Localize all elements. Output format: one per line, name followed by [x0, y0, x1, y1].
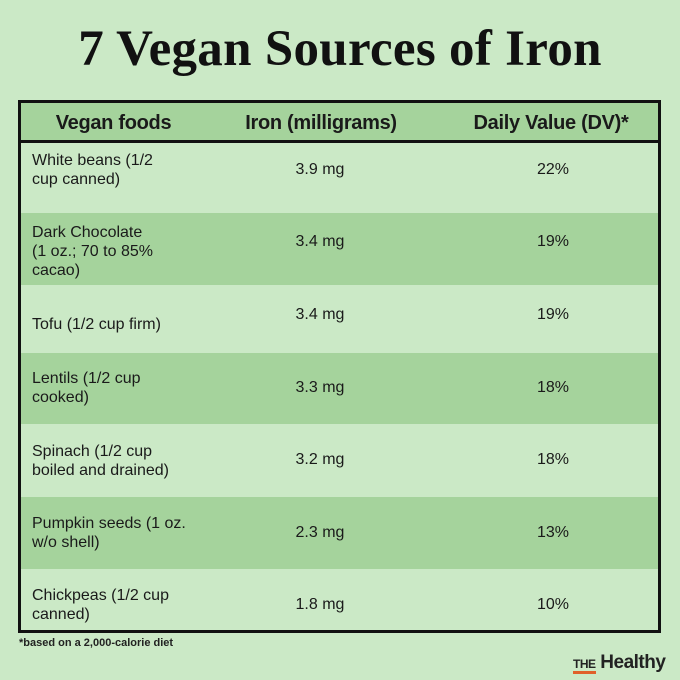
row: pumpkin seeds — [21, 497, 658, 569]
header row: Iron (milligrams) — [245, 112, 397, 134]
row: dark chocolate: Dark Chocolate — [32, 224, 142, 241]
row: lentils: cooked) — [32, 389, 89, 406]
row: spinach: 3.2 mg — [296, 451, 344, 468]
row: chickpeas: canned) — [32, 606, 90, 623]
row: white beans — [32, 152, 569, 188]
row: pumpkin seeds: w/o shell) — [32, 534, 100, 551]
row: spinach: Spinach (1/2 cup — [32, 443, 152, 460]
table — [18, 100, 661, 633]
header row — [21, 103, 658, 143]
row: white beans: White beans (1/2 — [32, 152, 153, 169]
row: chickpeas — [32, 587, 569, 623]
row: dark chocolate: (1 oz.; 70 to 85% — [32, 243, 153, 260]
logo: THE Healthy — [573, 652, 665, 673]
row: chickpeas: 1.8 mg — [296, 596, 344, 613]
row: pumpkin seeds: 13% — [537, 524, 569, 541]
title: 7 Vegan Sources of Iron — [78, 21, 602, 77]
row: white beans: cup canned) — [32, 171, 120, 188]
header row: Vegan foods — [56, 112, 171, 134]
row: pumpkin seeds: Pumpkin seeds (1 oz. — [32, 515, 186, 532]
row: chickpeas: Chickpeas (1/2 cup — [32, 587, 169, 604]
header row: Daily Value (DV)* — [474, 112, 628, 134]
row: tofu: 3.4 mg — [296, 306, 344, 323]
row: lentils: 3.3 mg — [296, 379, 344, 396]
row: spinach: 18% — [537, 451, 569, 468]
row: tofu: Tofu (1/2 cup firm) — [32, 316, 161, 333]
row: tofu: 19% — [537, 306, 569, 323]
row: spinach — [32, 443, 569, 479]
row: tofu — [32, 306, 569, 333]
row: lentils: 18% — [537, 379, 569, 396]
footnote: *based on a 2,000-calorie diet — [19, 637, 173, 649]
row: pumpkin seeds: 2.3 mg — [296, 524, 344, 541]
row: lentils: Lentils (1/2 cup — [32, 370, 141, 387]
row: lentils — [21, 353, 658, 424]
row: white beans: 3.9 mg — [296, 161, 344, 178]
row: dark chocolate: 19% — [537, 233, 569, 250]
row: dark chocolate: 3.4 mg — [296, 233, 344, 250]
row: dark chocolate: cacao) — [32, 262, 80, 279]
row: spinach: boiled and drained) — [32, 462, 169, 479]
row: white beans: 22% — [537, 161, 569, 178]
row: dark chocolate — [21, 213, 658, 285]
row: chickpeas: 10% — [537, 596, 569, 613]
